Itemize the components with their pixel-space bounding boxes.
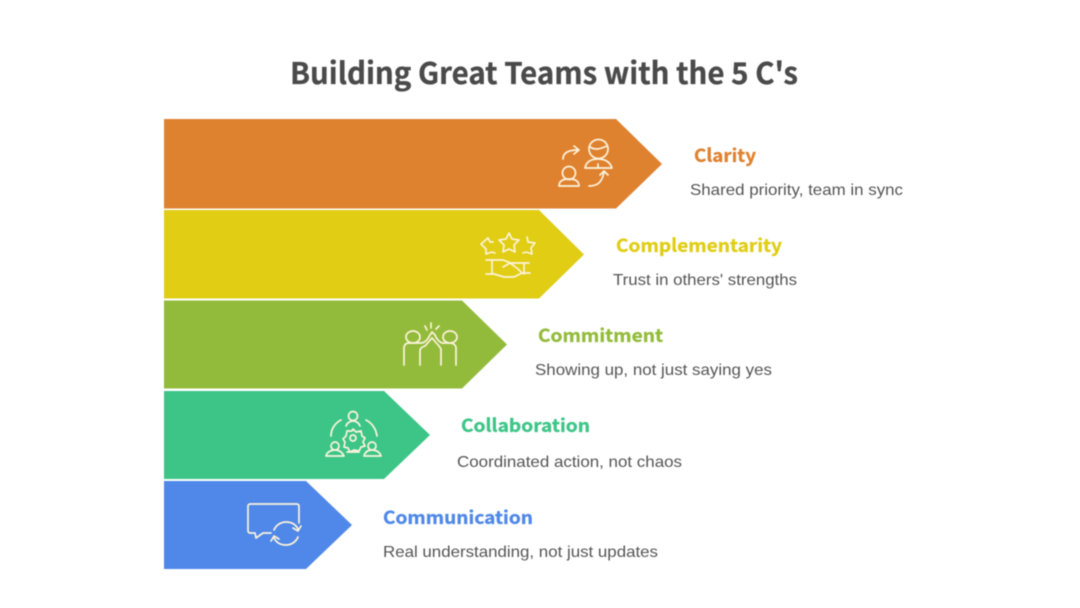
icon: high five bbox=[404, 323, 457, 365]
panel: commitment bbox=[164, 300, 772, 388]
icon: team around gear bbox=[326, 412, 381, 456]
text: collaboration: Coordinated action, not chaos bbox=[457, 454, 682, 471]
text: commitment: Showing up, not just saying yes bbox=[535, 362, 772, 379]
panel: communication bbox=[164, 481, 658, 569]
icon: chat with sync arrows bbox=[248, 504, 301, 545]
icon: people exchanging bbox=[559, 140, 612, 186]
arrow: complementarity bbox=[164, 210, 584, 298]
arrow: communication bbox=[164, 481, 352, 569]
text: communication: Real understanding, not just updates bbox=[383, 544, 658, 561]
title: Building Great Teams with the 5 C's bbox=[290, 49, 798, 93]
arrow: collaboration bbox=[164, 391, 430, 479]
panel: clarity bbox=[164, 119, 903, 208]
arrow: clarity bbox=[164, 119, 662, 208]
text: complementarity: Trust in others' strengths bbox=[613, 272, 797, 289]
heading: collaboration: Collaboration bbox=[461, 412, 590, 438]
heading: complementarity: Complementarity bbox=[616, 232, 783, 258]
text: clarity: Shared priority, team in sync bbox=[690, 182, 903, 199]
heading: commitment: Commitment bbox=[538, 322, 663, 348]
arrow: commitment bbox=[164, 300, 507, 388]
panel: complementarity bbox=[164, 210, 797, 298]
icon: stars and handshake bbox=[481, 233, 535, 277]
panel: collaboration bbox=[164, 391, 682, 479]
heading: communication: Communication bbox=[383, 504, 533, 530]
heading: clarity: Clarity bbox=[694, 142, 757, 168]
